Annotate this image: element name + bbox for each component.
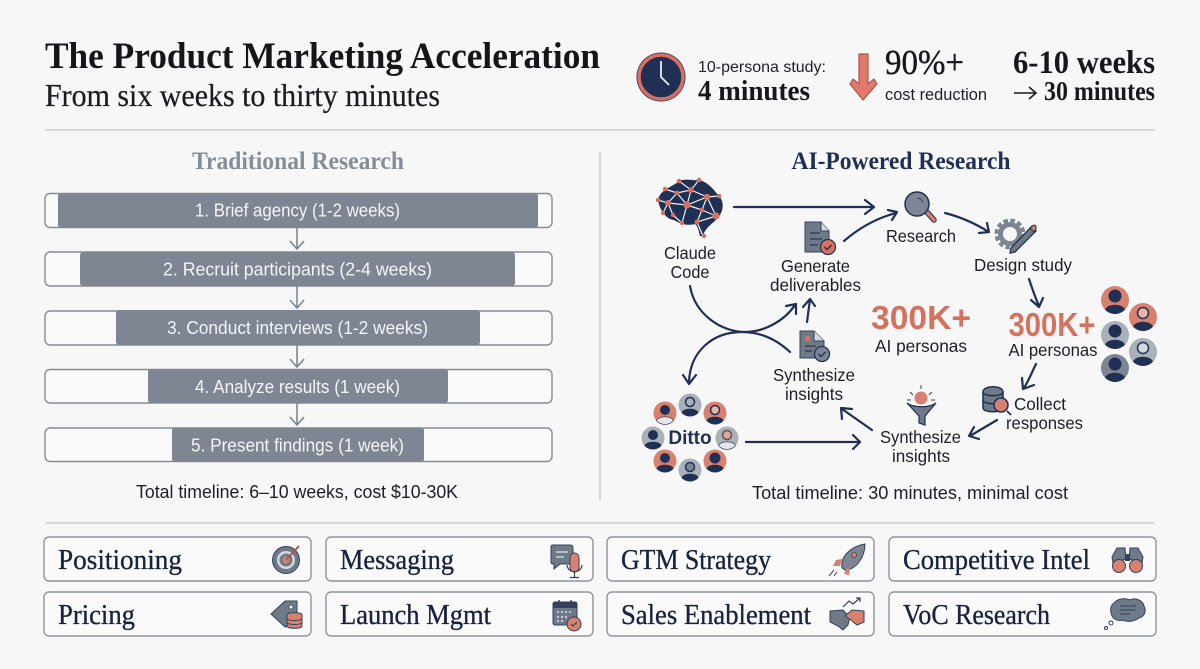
card: Pricing	[44, 592, 311, 636]
label: Synthesize insights left	[773, 365, 855, 404]
label: Synthesize insights right: insights	[892, 446, 950, 466]
card: Launch Mgmt: Launch Mgmt	[340, 599, 491, 631]
stat: 10-persona study	[636, 52, 826, 107]
icon: brain	[656, 178, 723, 238]
icon: funnel with bulb	[907, 385, 936, 425]
stat: 10-persona study: 4 minutes	[698, 75, 810, 107]
step 4: analyze results: 4. Analyze results (1 week)	[195, 376, 400, 397]
label: Synthesize insights left: insights	[785, 384, 843, 404]
persona	[704, 450, 726, 472]
icon: down arrow	[850, 54, 877, 100]
step 3: conduct interviews	[45, 310, 552, 345]
arrow	[290, 403, 304, 425]
card: Positioning: Positioning	[58, 544, 182, 576]
arrow: Collect to Synthesize	[969, 420, 997, 439]
step 1: brief agency	[45, 193, 552, 228]
label: Synthesize insights right: Synthesize	[880, 427, 961, 447]
label: Research: Research	[886, 226, 956, 246]
label: Claude Code: Code	[670, 262, 710, 282]
persona	[642, 426, 664, 450]
stat: cost reduction: cost reduction	[885, 85, 987, 104]
arrow: Research to Design	[945, 213, 989, 233]
card: VoC Research	[889, 592, 1156, 636]
panel: traditional research	[45, 148, 552, 502]
arrow: Synthesize curve to Ditto	[683, 332, 790, 384]
persona	[1101, 321, 1129, 349]
icon: magnifier	[905, 192, 934, 220]
arrow: deliverables to Research	[844, 210, 897, 241]
card: Sales Enablement	[607, 592, 874, 636]
arrow	[290, 345, 304, 367]
step 5: present findings: 5. Present findings (1 week)	[191, 434, 404, 456]
persona	[654, 450, 676, 472]
step 3: conduct interviews: 3. Conduct interviews (1-2 weeks)	[167, 317, 428, 338]
stat: 300K+ left: AI personas	[875, 336, 967, 356]
step 5: present findings	[45, 428, 552, 462]
label: Design study: Design study	[974, 255, 1072, 275]
icon: calendar check	[553, 600, 581, 631]
stat: weeks to minutes	[1013, 45, 1155, 106]
arrow: Design to personas	[1029, 279, 1043, 307]
arrow: Claude to Research	[734, 200, 874, 214]
card: Pricing: Pricing	[58, 599, 135, 631]
label: Generate deliverables	[770, 256, 861, 295]
icon: price tag and coins	[271, 601, 302, 628]
card: GTM Strategy: GTM Strategy	[621, 544, 771, 576]
stat: 300K+ left	[871, 299, 971, 356]
label: Synthesize insights right	[880, 427, 961, 466]
stat: 300K+ right	[1008, 306, 1098, 360]
card: Launch Mgmt	[326, 592, 593, 636]
stat: weeks to minutes: 6-10 weeks	[1013, 45, 1155, 81]
AI timeline: Total timeline: 30 minutes, minimal cost	[752, 483, 1068, 503]
persona	[1129, 303, 1157, 331]
stat: cost reduction	[850, 43, 987, 104]
Ditto persona ring	[642, 394, 738, 482]
panel: AI-powered research	[642, 148, 1157, 503]
icon: gear and pencil	[998, 222, 1036, 253]
step 4: analyze results	[45, 369, 552, 403]
step 2: recruit participants: 2. Recruit participants (2-4 weeks)	[163, 258, 432, 280]
arrow	[290, 228, 304, 249]
step 2: recruit participants	[45, 252, 552, 286]
card: Competitive Intel: Competitive Intel	[903, 544, 1090, 576]
heading: AI-powered research: AI-Powered Research	[792, 148, 1011, 175]
icon: chat and mic	[551, 545, 582, 578]
icon: target	[272, 546, 300, 574]
persona	[678, 458, 702, 482]
card: Messaging	[326, 537, 593, 581]
label: Claude Code	[664, 243, 716, 282]
arrow: Synthesize to Generate	[803, 299, 815, 322]
icon: handshake with trend	[830, 598, 864, 630]
label: Claude Code: Claude	[664, 243, 716, 263]
panel: use cases	[44, 537, 1156, 636]
heading: traditional research: Traditional Research	[192, 148, 404, 175]
icon: binoculars	[1112, 548, 1143, 572]
label: Collect responses	[1006, 394, 1083, 433]
persona	[1101, 286, 1129, 314]
label: Synthesize insights left: Synthesize	[773, 365, 855, 385]
step 1: brief agency: 1. Brief agency (1-2 weeks)	[195, 200, 400, 220]
icon: document badge	[800, 331, 830, 362]
persona	[654, 402, 676, 424]
card: GTM Strategy	[607, 537, 874, 581]
card: Positioning	[44, 537, 311, 581]
icon: thought bubble	[1104, 599, 1145, 630]
traditional timeline: Total timeline: 6–10 weeks, cost $10-30K	[136, 482, 458, 502]
card: Messaging: Messaging	[340, 544, 454, 576]
stat: cost reduction: 90%+	[885, 43, 964, 82]
stat: 10-persona study: 10-persona study:	[698, 59, 826, 76]
stat: 300K+ right: AI personas	[1008, 340, 1098, 360]
icon: rocket	[829, 544, 865, 576]
arrow: Claude Code curve to Generate	[690, 286, 796, 332]
persona cluster	[1101, 286, 1157, 382]
arrow: Synthesize to Synthesize	[841, 408, 872, 430]
stat: weeks to minutes: 30 minutes	[1044, 76, 1155, 106]
persona	[716, 426, 738, 450]
card: VoC Research: VoC Research	[903, 599, 1050, 631]
subtitle: From six weeks to thirty minutes	[45, 77, 440, 113]
arrow: personas to Collect	[1022, 364, 1036, 389]
Ditto label: Ditto	[668, 428, 712, 449]
label: Collect responses: responses	[1006, 413, 1083, 433]
persona	[1129, 338, 1157, 366]
persona	[1101, 354, 1129, 382]
card: Competitive Intel	[889, 537, 1156, 581]
title: The Product Marketing Acceleration	[45, 36, 600, 77]
persona	[704, 402, 726, 424]
persona	[678, 394, 702, 416]
icon: database search	[983, 387, 1011, 415]
arrow	[290, 286, 304, 308]
label: Collect responses: Collect	[1014, 394, 1066, 414]
stat: 300K+ left: 300K+	[871, 299, 971, 336]
card: Sales Enablement: Sales Enablement	[621, 599, 811, 631]
icon: clock	[636, 52, 686, 102]
stat: 300K+ right: 300K+	[1008, 306, 1096, 343]
icon: document check	[805, 222, 836, 254]
label: Generate deliverables: deliverables	[770, 275, 861, 295]
arrow: Ditto to Synthesize	[746, 435, 860, 449]
label: Generate deliverables: Generate	[781, 256, 850, 276]
